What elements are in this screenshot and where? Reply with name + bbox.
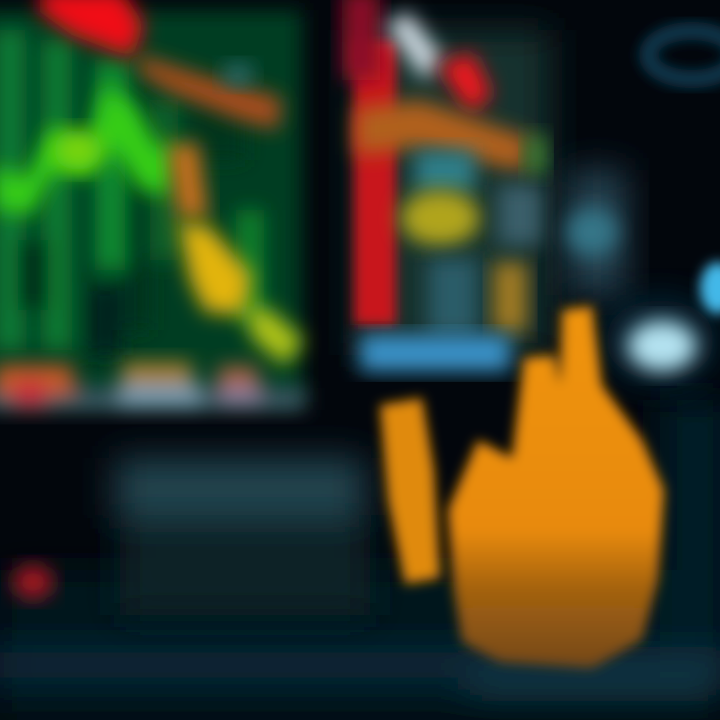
slate column	[428, 258, 478, 336]
icon: orange hand	[380, 306, 664, 668]
palm and fingers	[448, 306, 664, 668]
teal core	[415, 150, 475, 192]
green line	[0, 85, 175, 215]
background right: blurred screen objects	[566, 31, 720, 380]
blue light edge	[700, 262, 720, 314]
bottom ticker strip	[0, 362, 305, 410]
desk surface	[0, 400, 720, 720]
white diagonal segment	[386, 12, 442, 80]
lime tail	[245, 305, 304, 366]
orange line segment	[168, 142, 208, 218]
teal spot	[222, 63, 254, 87]
orange horizontal trace	[355, 100, 530, 172]
bright green peak	[54, 130, 102, 170]
orange downward line	[138, 55, 282, 130]
green accent	[525, 135, 547, 175]
yellow line	[178, 222, 252, 315]
dark blue glow	[605, 300, 715, 380]
blue glow	[566, 208, 618, 256]
red diagonal segment	[438, 52, 492, 114]
monitor background	[355, 30, 550, 355]
upper dark red	[342, 0, 380, 80]
pale blue light	[628, 321, 696, 371]
red vertical bar	[354, 40, 396, 325]
red top bar	[40, 0, 144, 58]
blue bottom strip	[360, 335, 510, 371]
ring top right	[648, 31, 720, 79]
monitor background	[0, 10, 302, 402]
yellow blob	[400, 190, 480, 246]
red indicator light	[13, 565, 53, 599]
panel: left monitor chart	[0, 0, 305, 410]
panel: right monitor chart	[342, 0, 550, 371]
thumb	[380, 398, 440, 584]
chart candle columns	[0, 30, 264, 355]
pale column	[568, 170, 626, 295]
dark device	[115, 458, 370, 615]
orange column	[493, 262, 527, 332]
slate right column	[498, 185, 542, 245]
